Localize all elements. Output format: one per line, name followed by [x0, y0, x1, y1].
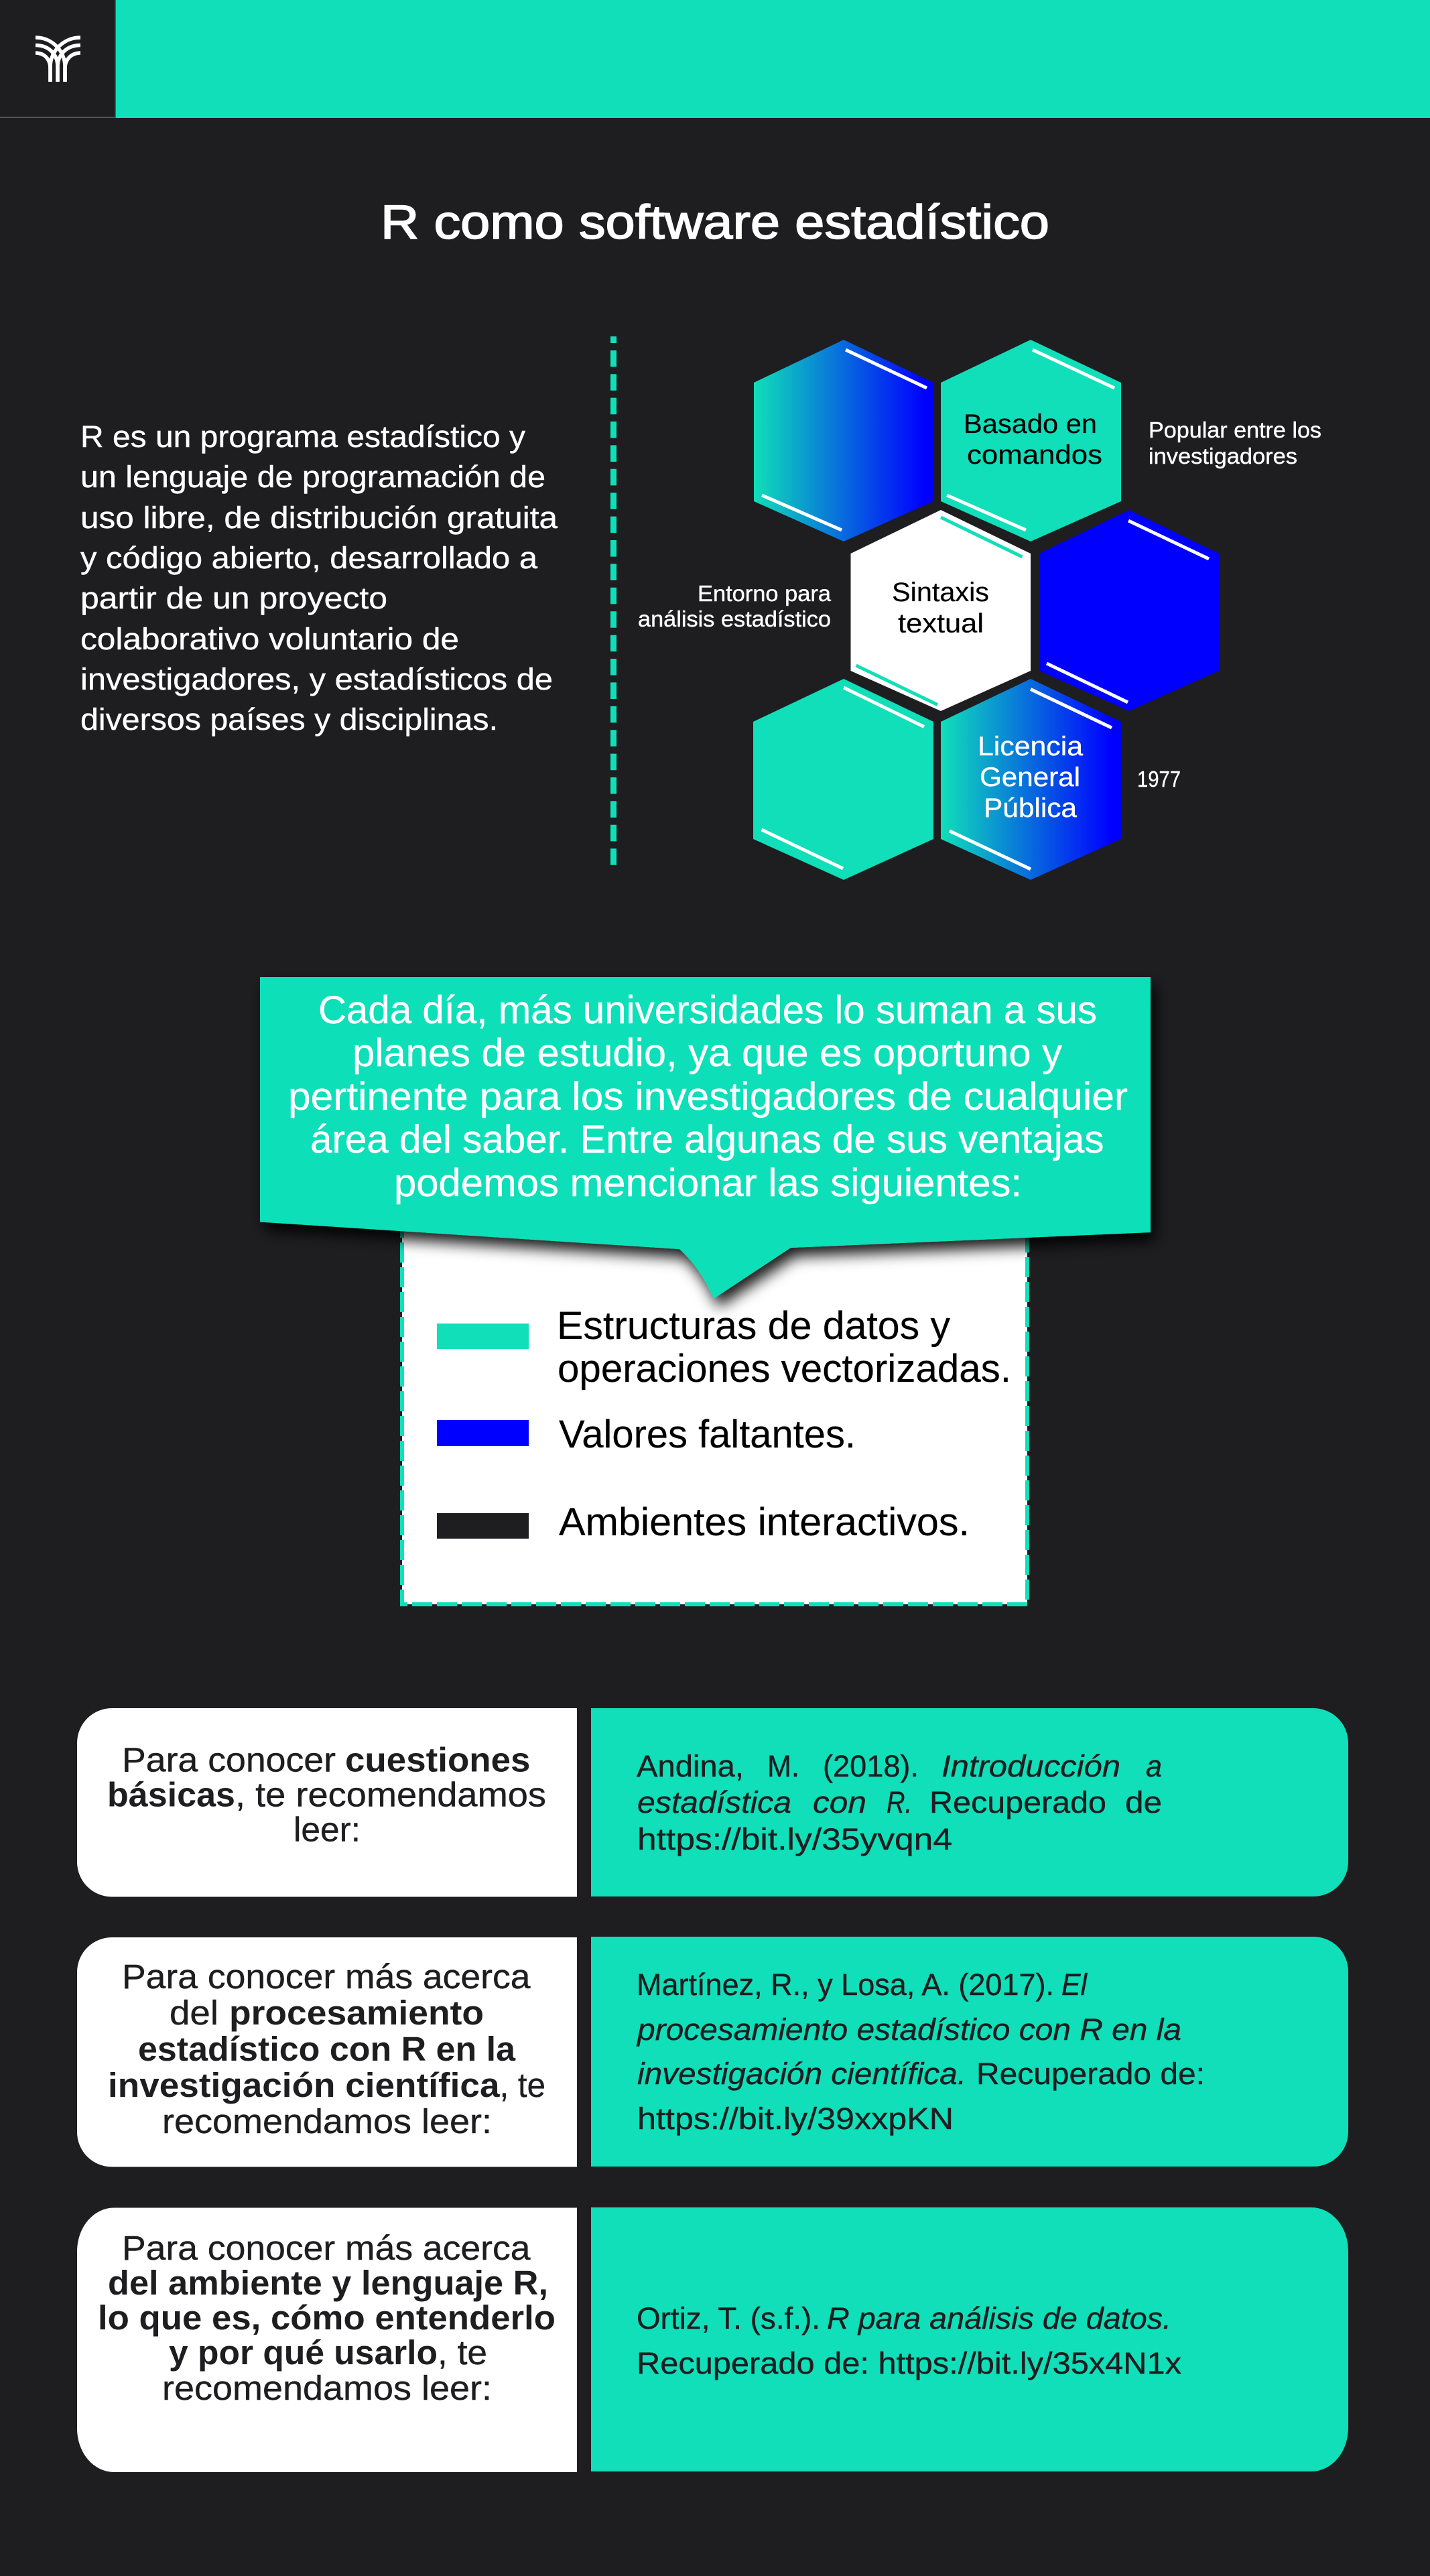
card citation: Andina 2018: a — [1146, 1749, 1162, 1783]
label: Popular entre los investigadores: Popular entre los — [1149, 417, 1321, 442]
list item: Estructuras — [557, 1304, 1011, 1391]
legend swatch: teal — [437, 1324, 529, 1349]
hexagon: gradient top left — [754, 340, 933, 541]
card prompt: ambiente y lenguaje R: recomendamos leer: — [162, 2369, 492, 2407]
hexagon: Licencia General Pública: Licencia — [978, 732, 1084, 761]
card prompt: ambiente y lenguaje R — [77, 2207, 577, 2472]
card citation: Martínez y Losa 2017: Recuperado de: — [976, 2057, 1205, 2091]
hexagon: Sintaxis textual: Sintaxis — [892, 578, 989, 607]
card citation: Martínez y Losa 2017: El — [1061, 1968, 1088, 2002]
card citation: Andina 2018: M. — [767, 1749, 799, 1783]
callout: pertinente para los investigadores de cualquier — [288, 1075, 1128, 1118]
hexagon: blue — [1039, 510, 1219, 711]
card prompt: cuestiones básicas — [77, 1708, 577, 1896]
divider: dashed vertical line — [610, 336, 616, 866]
card prompt: cuestiones básicas: Para conocer — [122, 1741, 336, 1779]
card prompt: cuestiones básicas: cuestiones — [345, 1741, 531, 1779]
label: Popular entre los investigadores: investigadores — [1149, 444, 1297, 468]
card citation: Andina 2018: Recuperado — [929, 1785, 1106, 1819]
card prompt: procesamiento estadístico: Para conocer más acerca — [122, 1957, 531, 1996]
card prompt: ambiente y lenguaje R: y por qué usarlo — [169, 2333, 438, 2372]
hexagon chart — [753, 340, 1219, 880]
callout: planes de estudio, ya que es oportuno y — [352, 1031, 1062, 1075]
hexagon: Basado en comandos — [941, 340, 1121, 541]
label: Entorno para análisis estadístico: Entorno para — [698, 581, 832, 606]
panel: reference card 2 — [77, 1937, 1348, 2167]
callout: Cada día, más universidades lo suman a sus — [318, 988, 1097, 1032]
title: R como software estadístico — [381, 196, 1049, 249]
card citation: Martínez y Losa 2017: https://bit.ly/39xxpKN — [637, 2102, 954, 2136]
callout — [260, 977, 1151, 1299]
panel: advantages list — [402, 1213, 1027, 1604]
text block: intro paragraph: R es un programa estadístico y — [80, 420, 526, 454]
text block: intro paragraph — [80, 420, 558, 736]
card prompt: cuestiones básicas: , te recomendamos — [235, 1776, 546, 1813]
hexagon: Sintaxis textual — [851, 510, 1031, 711]
card prompt: cuestiones básicas: básicas — [107, 1776, 235, 1813]
text block: intro paragraph: uso libre, de distribución gratuita — [80, 501, 558, 535]
hexagon: Licencia General Pública: Pública — [984, 793, 1078, 823]
hexagon: Sintaxis textual: textual — [898, 608, 984, 638]
card prompt: procesamiento estadístico: investigación científica — [108, 2066, 500, 2104]
card citation: Martínez y Losa 2017 — [591, 1937, 1348, 2167]
card prompt: procesamiento estadístico — [77, 1937, 577, 2167]
panel: reference card 3 — [77, 2207, 1348, 2472]
card prompt: procesamiento estadístico: procesamiento — [229, 1994, 484, 2032]
card citation: Martínez y Losa 2017: investigación científica. — [637, 2057, 966, 2091]
card prompt: ambiente y lenguaje R: lo que es, cómo entenderlo — [98, 2299, 556, 2337]
card prompt: procesamiento estadístico: recomendamos leer: — [162, 2102, 492, 2140]
list item: Valores faltantes: Valores faltantes. — [559, 1413, 856, 1456]
text block: intro paragraph: colaborativo voluntario de — [80, 622, 459, 656]
callout: área del saber. Entre algunas de sus ventajas — [310, 1118, 1104, 1161]
hexagon: Basado en comandos: comandos — [967, 440, 1102, 470]
label: Entorno para análisis estadístico — [638, 581, 832, 631]
card citation: Andina 2018: Introducción — [941, 1749, 1120, 1783]
list item: Estructuras: Estructuras de datos y — [557, 1304, 950, 1348]
list item: Ambientes interactivos: Ambientes interactivos. — [559, 1500, 970, 1544]
card citation: Ortiz s.f.: R para análisis de datos. — [827, 2301, 1171, 2335]
text block: intro paragraph: un lenguaje de programación de — [80, 460, 545, 494]
card citation: Andina 2018: https://bit.ly/35yvqn4 — [637, 1822, 952, 1856]
hexagon: Licencia General Pública: General — [980, 763, 1080, 792]
text block: intro paragraph: partir de un proyecto — [80, 581, 387, 615]
list item: Estructuras: operaciones vectorizadas. — [558, 1347, 1011, 1391]
card citation: Andina 2018 — [591, 1708, 1348, 1896]
card prompt: ambiente y lenguaje R: , te — [438, 2333, 487, 2372]
card citation: Ortiz s.f. — [591, 2207, 1348, 2471]
card citation: Andina 2018: de — [1125, 1785, 1162, 1819]
legend swatch: blue — [437, 1420, 529, 1446]
card prompt: ambiente y lenguaje R: del ambiente y lenguaje R, — [108, 2264, 548, 2302]
card prompt: procesamiento estadístico: estadístico con R en la — [138, 2030, 516, 2068]
text block: intro paragraph: y código abierto, desarrollado a — [80, 541, 538, 575]
card citation: Andina 2018: estadística — [637, 1785, 791, 1819]
card citation: Ortiz s.f.: Ortiz, T. (s.f.). — [637, 2301, 820, 2335]
card prompt: cuestiones básicas: leer: — [294, 1811, 361, 1848]
icon: logo — [36, 38, 80, 82]
header bar — [0, 0, 1430, 118]
card citation: Andina 2018: (2018). — [823, 1749, 919, 1783]
card citation: Andina 2018: R. — [887, 1785, 912, 1819]
panel: reference card 1 — [77, 1708, 1348, 1896]
card citation: Andina 2018: Andina, — [637, 1749, 744, 1783]
text block: intro paragraph: investigadores, y estadísticos de — [80, 662, 553, 696]
card citation: Andina 2018: con — [813, 1785, 866, 1819]
label: 1977: 1977 — [1137, 767, 1181, 791]
card citation: Martínez y Losa 2017: procesamiento estadístico con R en la — [636, 2012, 1181, 2047]
card prompt: procesamiento estadístico: del — [170, 1994, 218, 2032]
label: Popular entre los investigadores — [1149, 417, 1321, 468]
hexagon: Licencia General Pública — [941, 679, 1121, 880]
card prompt: ambiente y lenguaje R: Para conocer más acerca — [122, 2229, 531, 2267]
legend swatch: dark — [437, 1513, 529, 1539]
card citation: Ortiz s.f.: Recuperado de: https://bit.ly/35x4N1x — [637, 2346, 1182, 2380]
hexagon: Basado en comandos: Basado en — [964, 409, 1097, 439]
card prompt: procesamiento estadístico: , te — [500, 2066, 545, 2104]
card citation: Martínez y Losa 2017: Martínez, R., y Losa, A. (2017). — [637, 1968, 1054, 2002]
text block: intro paragraph: diversos países y disciplinas. — [80, 702, 498, 736]
label: Entorno para análisis estadístico: análisis estadístico — [638, 606, 831, 631]
hexagon: teal bottom left — [753, 679, 933, 880]
callout: podemos mencionar las siguientes: — [394, 1161, 1022, 1205]
